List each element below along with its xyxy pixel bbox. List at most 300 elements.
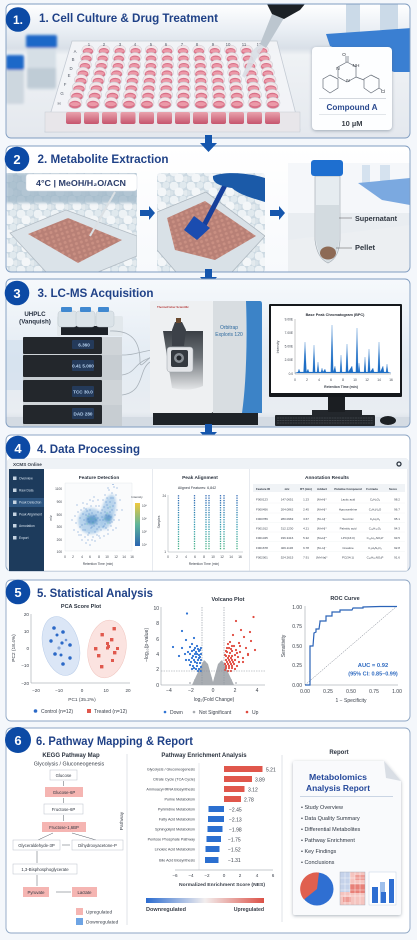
pathway enrichment chart: Bile Acid Biosynthesis [159,858,195,862]
96-well plate: 7 [181,42,184,47]
pathway enrichment chart: 2 [239,873,242,878]
feature detection chart: 10⁸ [142,504,148,508]
sidebar: Overview [19,476,33,480]
volcano plot: 2 [156,667,159,673]
annotation results table: Feature ID [256,487,270,491]
badge 3 [5,281,29,305]
compound labels: N [336,66,340,72]
report heatmap [340,872,365,905]
PCA score plot: 20 [125,688,131,693]
annotation results table: Putative Compound [334,487,362,491]
volcano plot [144,597,265,716]
peak alignment chart: 1 [164,550,166,554]
AUC annotation: (95% CI: 0.85–0.99) [348,672,398,678]
annotation results table: Lactic acid [341,498,355,502]
badge 1: 1. [13,13,23,27]
96-well plate: H [57,101,61,106]
pathway enrichment chart: 4 [256,873,259,878]
feature detection chart: 10⁴ [142,543,148,547]
annotation results table: PC(34:1) [342,556,354,560]
annotation results table: 96.7 [394,508,400,512]
annotation results table: Score [389,487,397,491]
KEGG pathway map: Glyceraldehyde-3P [18,843,55,848]
ROC curve: 0.00 [292,683,302,689]
annotation results table: 147.0651 [281,498,294,502]
peak alignment chart: Aligned Features: 6,842 [178,486,216,490]
pathway enrichment chart [146,753,276,913]
UHPLC label [19,311,51,326]
annotation results table: [M+H]⁺ [317,508,327,512]
panel: pathway mapping and report: Pathway [119,811,125,830]
KEGG pathway map: KEGG Pathway Map [42,753,100,759]
feature detection chart: 2 [72,555,74,559]
feature detection chart: Feature Detection [79,475,119,481]
chromatogram title: Base Peak Chromatogram (BPC) [306,313,365,317]
pathway enrichment chart: Glycolysis / Gluconeogenesis [147,768,195,772]
chromatogram axes: 2.00E [285,358,293,362]
report contents list [301,805,361,866]
panel: LC-MS acquisition [5,279,410,429]
mass spectrometer [150,301,262,425]
arrow: step 2 to 3 [200,269,217,286]
peak alignment chart [157,475,243,566]
chromatogram axes: Retention Time (min) [324,385,358,389]
96-well plate [45,41,300,132]
ROC curve: 1 − Specificity [336,698,367,704]
peak alignment chart: Peak Alignment [182,475,218,481]
compound labels: O [342,52,346,58]
AUC annotation [348,663,398,678]
annotation results table: [M+Na]⁺ [316,556,328,560]
PCA score plot: 10 [24,629,29,634]
PCA score plot: 0 [26,646,29,651]
annotation results table: [M−H]⁻ [317,517,327,521]
annotation results table: 312.1230 [281,526,294,530]
report document [293,761,401,915]
annotation results table: Formula [366,487,378,491]
UHPLC stack: DAD 280 [74,412,93,416]
peak alignment chart: 12 [220,555,224,559]
annotation results table: [M+H]⁺ [317,536,327,540]
sidebar [9,469,44,571]
feature detection chart: Intensity [131,495,143,499]
annotation results table: Adduct [317,487,327,491]
PCA score plot: PC1 (35.2%) [68,697,96,703]
chromatogram axes: 16 [389,378,393,382]
pathway enrichment chart: Citrate Cycle (TCA Cycle) [153,778,195,782]
sidebar: Raw Data [19,488,34,492]
annotation results table: C₄H₉N₃O₂ [368,546,383,550]
annotation results table: F002001 [256,556,268,560]
annotation results table: F000456 [256,508,268,512]
instrument name [215,325,243,338]
ROC curve: 0.00 [300,689,310,695]
ROC curve [281,596,402,704]
pathway enrichment chart: Sphingolipid Metabolism [155,828,195,832]
annotation results table: 1.23 [303,498,309,502]
peak alignment chart: 2 [176,555,178,559]
chromatogram axes: 9.00E [285,318,293,322]
report contents list: • Differential Metabolites [301,827,361,833]
PCA score plot: PC2 (18.4%) [11,634,17,662]
pathway enrichment chart: 6 [272,873,275,878]
pathway enrichment chart: −1.31 [228,858,241,864]
volcano plot: −log₁₀(p-value) [144,628,150,662]
instrument name: Exploris 120 [215,332,243,338]
peak alignment chart: 24 [162,494,166,498]
heading 5: 5. Statistical Analysis [37,586,153,600]
96-well plate: A [74,49,77,54]
ROC curve: 1.00 [392,689,402,695]
annotation results table [253,475,405,560]
96-well plate: 6 [165,42,168,47]
peak alignment chart: 14 [229,555,233,559]
AUC annotation: AUC = 0.92 [358,663,388,669]
volcano legend [164,710,259,716]
window title bar [8,459,408,469]
compound name: Compound A [326,103,378,112]
volcano legend: Not Significant [199,710,232,716]
pathway enrichment chart: 5.21 [266,768,276,774]
chromatogram axes: 14 [377,378,381,382]
annotation results table: 7.91 [303,556,309,560]
report contents list: • Key Findings [301,849,336,855]
PCA legend [34,709,127,715]
extraction image: centrifuge tube [288,160,410,272]
badge 3: 3 [13,286,21,301]
PCA score plot: −20 [21,681,29,686]
volcano plot: Volcano Plot [212,597,245,603]
badge 5: 5 [14,585,22,600]
annotation results table: 93.5 [394,536,400,540]
badge 6 [5,727,31,753]
KEGG pathway map: Glucose [56,773,72,778]
peak alignment chart: 8 [203,555,205,559]
96-well plate: 11 [242,42,247,47]
feature detection chart: 10 [105,555,109,559]
UHPLC stack: TCC 30.0 [73,390,93,394]
annotation results table: F001012 [256,526,268,530]
annotation results table: F001678 [256,546,268,550]
pathway enrichment chart: 3.89 [255,778,265,784]
heading 1: 1. Cell Culture & Drug Treatment [39,11,218,25]
enrichment colour scale: Downregulated [146,907,186,913]
chromatogram axes: 0 [294,378,296,382]
ROC curve: 1.00 [292,605,302,611]
icon: compound structure [323,56,382,93]
pathway enrichment chart: −4 [188,873,194,878]
96-well plate: 2 [103,42,106,47]
pathway enrichment chart: 2.78 [244,798,254,804]
annotation results table: [M+H]⁺ [317,526,327,530]
ROC curve: Sensitivity [281,634,287,657]
feature detection chart: 12 [114,555,118,559]
feature detection chart: Retention Time (min) [83,562,113,566]
enrichment colour scale: Upregulated [234,907,264,913]
annotation results table: C₁₆H₃₂O₂ [369,526,382,530]
96-well plate: E [68,73,71,78]
96-well plate: 5 [150,42,153,47]
chromatogram axes: 2 [306,378,308,382]
reagent label: 4°C | MeOH/H₂O/ACN [36,179,126,188]
annotation results table: LPC(16:0) [341,536,355,540]
volcano plot: 4 [256,688,259,694]
ROC curve: 0.25 [323,689,333,695]
annotation results table: 204.0862 [281,508,294,512]
report title [306,772,370,793]
arrow [270,206,285,220]
enrichment colour scale [146,898,264,913]
KEGG pathway map: Lactate [77,890,92,895]
heading 2: 2. Metabolite Extraction [38,152,168,166]
ROC curve: 0.75 [369,689,379,695]
compound labels: N [346,78,350,84]
tube label supernatant: Supernatant [355,214,398,223]
compound dose: 10 µM [342,119,362,128]
annotation results table: 524.2615 [281,556,294,560]
badge 2 [5,147,29,171]
peak alignment chart: 0 [167,555,169,559]
KEGG pathway map: 1,3-Bisphosphoglycerate [21,867,69,872]
96-well plate: B [72,57,75,62]
annotation results table: 95.1 [394,517,400,521]
sidebar: Peak Detection [19,500,42,504]
feature detection chart: 8 [98,555,100,559]
feature detection chart: 10⁵ [142,530,148,534]
chromatogram axes: 12 [365,378,369,382]
annotation results table: Palmitic acid [340,526,357,530]
96-well plate: 10 [226,42,231,47]
feature detection chart: 4 [81,555,83,559]
badge 2: 2 [13,152,21,167]
brand label: ThermoFisher Scientific [157,305,189,309]
software window [8,459,408,571]
annotation results table: 280.0963 [281,517,294,521]
PCA legend: Treated (n=12) [94,709,127,715]
badge 1 [6,7,30,32]
peak alignment chart: 6 [194,555,196,559]
icon: pipette [242,4,305,78]
ROC curve: 0.25 [292,663,302,669]
peak alignment chart: 4 [185,555,187,559]
chromatogram axes: 10 [353,378,357,382]
ROC curve: 0.50 [292,644,302,650]
report contents list: • Study Overview [301,805,343,811]
KEGG pathway map: Glucose-6P [53,790,75,795]
chromatogram axes: 0.0 [289,372,293,376]
feature detection chart: 1100 [55,487,62,491]
volcano plot: 8 [156,621,159,627]
pathway enrichment chart: −1.98 [229,828,242,834]
UHPLC stack: 0.41 5.000 [72,364,94,368]
icon: blurred tube rack [326,4,412,72]
96-well plate: F [64,82,67,87]
badge 4: 4 [14,441,22,456]
pathway enrichment chart: −2.45 [229,808,242,814]
sidebar: Export [19,536,29,540]
KEGG pathway map: Dihydroxyacetone-P [78,843,117,848]
annotation results table: C₂₄H₅₀NO₇P [367,536,383,540]
badge 6: 6 [14,733,22,748]
report contents list: • Pathway Enrichment [301,838,355,844]
pathway enrichment chart: −1.75 [228,838,241,844]
annotation results table: C₃H₆O₃ [370,498,381,502]
extraction image: scraping [157,173,265,272]
heading 3: 3. LC-MS Acquisition [38,286,154,300]
annotation results table: m/z [285,487,290,491]
report contents list: • Conclusions [301,860,335,866]
pathway enrichment chart: Pentose Phosphate Pathway [148,838,195,842]
pathway enrichment chart: Purine Metabolism [164,798,195,802]
report heading: Report [329,750,349,756]
arrow: step 3 to 4 [200,424,217,441]
pathway enrichment chart: −1.52 [228,848,241,854]
volcano plot: 0 [156,683,159,689]
annotation results table: C₄H₆O₄ [370,517,381,521]
peak alignment chart: 10 [211,555,215,559]
feature detection chart: 100 [57,550,62,554]
keyboard [275,415,375,426]
96-well plate: 9 [212,42,215,47]
UHPLC stack: 6.360 [78,342,90,348]
compound labels [336,52,385,95]
volcano plot: 4 [156,652,159,658]
volcano legend: Down [170,710,183,716]
reagent label [26,174,137,191]
feature detection chart: 0 [64,555,66,559]
report pie chart [300,872,334,906]
chromatogram axes: 5.00E [285,344,293,348]
annotation results table: C₄₂H₈₂NO₈P [367,556,383,560]
annotation results table: 91.6 [394,556,400,560]
badge 4 [6,436,30,460]
annotation results table: C₅H₄N₄O [369,508,382,512]
volcano plot: 2 [234,688,237,694]
report contents list: • Data Quality Summary [301,816,360,822]
PCA score plot: 0 [81,688,84,693]
annotation results table: F000123 [256,498,268,502]
ROC curve: 0.75 [292,624,302,630]
window title bar: XCMS Online [13,462,42,467]
compound card [312,47,392,130]
KEGG pathway map: Pyruvate [28,890,45,895]
PCA score plot: PCA Score Plot [61,604,101,610]
annotation results table: 4.21 [303,526,309,530]
report bar chart [369,872,396,905]
heading 4: 4. Data Processing [37,442,140,456]
feature detection chart: 300 [57,525,62,529]
ROC curve: 0.50 [346,689,356,695]
volcano legend: Up [252,710,259,716]
96-well plate: 4 [134,42,137,47]
annotation results table: Hypoxanthine [339,508,357,512]
pathway enrichment chart: Aminoacyl-tRNA Biosynthesis [146,788,195,792]
feature detection chart: 16 [130,555,134,559]
annotation results table: 409.1136 [281,546,293,550]
KEGG pathway map: Fructose-6P [52,807,75,812]
peak alignment chart: Samples [157,515,161,528]
annotation results table: 336.3416 [281,536,294,540]
pathway enrichment chart: Pathway Enrichment Analysis [161,753,247,759]
annotation results table: [M+H]⁺ [317,498,327,502]
volcano plot: 6 [156,637,159,643]
annotation results table: 2.45 [303,508,309,512]
feature detection chart: 900 [57,500,62,504]
96-well plate: 12 [257,42,262,47]
feature detection chart [49,475,148,566]
96-well plate: 3 [119,42,122,47]
96-well plate: 1 [88,42,91,47]
pathway enrichment chart: Fatty Acid Metabolism [159,818,195,822]
chromatogram trace [295,325,391,373]
sidebar: Peak Alignment [19,512,42,516]
pathway enrichment chart: Pyrimidine Metabolism [158,808,195,812]
ROC curve: ROC Curve [330,596,360,602]
feature detection chart: 14 [122,555,126,559]
capillary tubing [110,330,150,396]
volcano plot: 10 [153,606,159,612]
annotation results table: Annotation Results [305,475,349,481]
panel: data processing [6,435,410,571]
chromatogram axes: 7.00E [285,331,293,335]
report title: Analysis Report [306,783,370,793]
annotation results table: 3.67 [303,517,309,521]
annotation results table: 98.2 [394,498,400,502]
annotation results table: 5.32 [303,536,309,540]
pathway enrichment chart: −2.13 [229,818,242,824]
feature detection chart: m/z [49,515,53,521]
annotation results table: RT (min) [300,487,312,491]
pathway enrichment chart: Normalized Enrichment Score (NES) [179,882,266,887]
annotation results table: F001345 [256,536,268,540]
volcano plot: −2 [188,688,194,694]
KEGG pathway map: Glycolysis / Gluconeogenesis [34,762,105,768]
KEGG pathway map: Fructose-1,6BP [49,825,79,830]
96-well plate: 8 [196,42,199,47]
badge 5 [6,580,30,604]
panel: metabolite extraction [5,146,410,272]
feature detection chart: 10⁶ [142,517,148,521]
arrow [140,206,155,220]
annotation results table: 6.78 [303,546,309,550]
PCA score plot: 10 [103,688,109,693]
pathway enrichment chart: −6 [172,873,178,878]
annotation results table: 92.8 [394,546,400,550]
chromatogram axes: 4 [318,378,320,382]
peak alignment chart: Retention Time (min) [189,562,219,566]
mouse [380,416,396,425]
volcano plot: log₂(Fold Change) [194,697,235,703]
pathway legend: Downregulated [86,920,119,926]
report title: Metabolomics [309,772,367,782]
pathway enrichment chart: Linoleic Acid Metabolism [155,848,195,852]
compound labels: NH [353,63,360,69]
heading 6: 6. Pathway Mapping & Report [36,734,193,748]
pathway enrichment chart: 0 [223,873,226,878]
chromatogram axes: 6 [330,378,332,382]
pathway legend [76,908,119,926]
pathway enrichment chart: 3.12 [248,788,258,794]
pathway legend: Upregulated [86,910,112,916]
KEGG pathway map [13,753,123,926]
panel: statistical analysis [6,580,410,721]
monitor with chromatogram [269,304,402,416]
chromatogram axes: 8 [342,378,344,382]
instrument name: Orbitrap [220,325,238,331]
pathway enrichment chart: −2 [204,873,210,878]
96-well plate: G [60,91,64,96]
chromatogram axes: Intensity [276,340,280,353]
